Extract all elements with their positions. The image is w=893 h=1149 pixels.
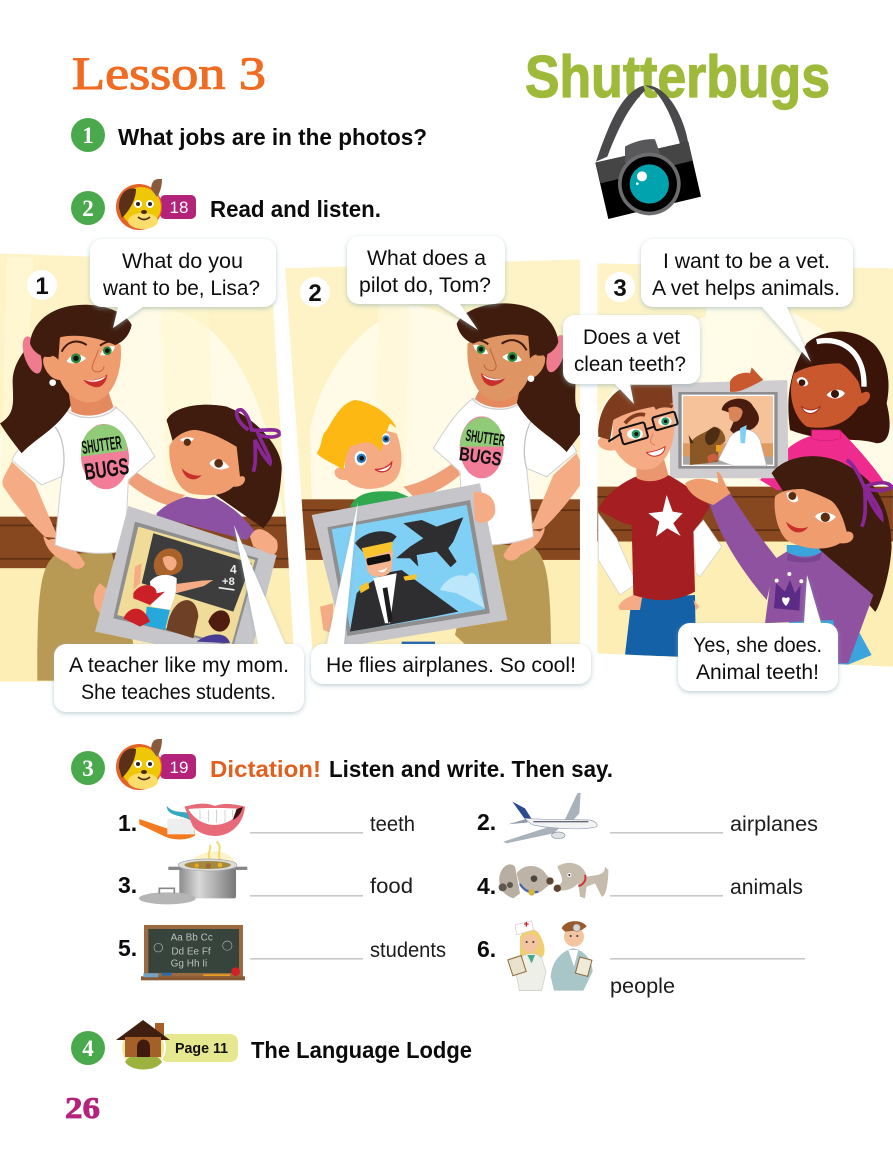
exercise item 1: teeth [118, 804, 415, 839]
icon: audio dog with track 18: 18 [170, 198, 188, 217]
speech bubble: A teacher like my mom: She teaches students. [81, 681, 276, 704]
exercise item 3: food: 3. [118, 872, 137, 898]
speech bubble: He flies airplanes [311, 502, 591, 684]
mom body mirrored [403, 398, 586, 672]
speech bubble: What does a pilot do, Tom?: What does a [367, 247, 486, 270]
step 3 badge: 3 [82, 756, 94, 781]
step 2 badge [71, 191, 105, 225]
speech bubble: Yes, she does [678, 575, 838, 691]
instruction 3 [210, 756, 613, 782]
step 2 badge: 2 [82, 196, 94, 221]
speech bubble: A teacher like my mom: A teacher like my mom. [69, 654, 289, 677]
exercise item 5: students [118, 925, 446, 980]
speech bubble: Does a vet clean teeth?: Does a vet [583, 326, 680, 349]
exercise item 5: students: Gg Hh Ii [171, 959, 207, 970]
icon: audio dog with track 19: 19 [170, 758, 188, 777]
frame with teacher photo: +8 [222, 576, 235, 588]
Lisa [157, 405, 282, 540]
heading: Shutterbugs: Shutterbugs [525, 44, 830, 110]
mom body mirrored: BUGS [458, 444, 503, 471]
exercise item 6: people: 6. [477, 936, 496, 962]
speech bubble: A teacher like my mom [54, 525, 304, 712]
speech bubble: Yes, she does: Animal teeth! [696, 661, 819, 684]
exercise item 4: animals: 4. [477, 873, 496, 899]
exercise item 5: students: students [370, 939, 446, 962]
vet-girl [760, 331, 890, 490]
speech bubble: Does a vet clean teeth? [563, 315, 700, 404]
mom body: BUGS [82, 453, 131, 485]
instruction 2: Read and listen. [210, 196, 381, 222]
instruction 4: The Language Lodge [251, 1037, 472, 1063]
title: Lesson 3: Lesson 3 [72, 48, 266, 100]
speech bubble: He flies airplanes: He flies airplanes. So cool! [326, 654, 576, 677]
exercise item 2: airplanes: airplanes [730, 813, 818, 836]
speech bubble: Does a vet clean teeth?: clean teeth? [574, 353, 686, 376]
icon: hanging camera [595, 86, 701, 219]
speech bubble: I want to be a vet [641, 239, 853, 362]
frame with teacher photo [94, 506, 278, 644]
number 3: 3 [613, 275, 627, 302]
number 1 [27, 270, 57, 300]
exercise item 2: airplanes [477, 793, 818, 843]
exercise item 6: people [477, 921, 805, 998]
icon: audio dog with track 19 [116, 739, 196, 790]
panel 3: vet [597, 262, 893, 668]
exercise item 6: people: people [610, 975, 675, 998]
exercise item 5: students: Dd Ee Ff [171, 946, 211, 957]
speech bubble: What does a pilot do, Tom? [347, 236, 505, 330]
exercise item 3: food: food [370, 875, 413, 898]
mom head [0, 305, 132, 453]
exercise item 4: animals: animals [730, 876, 803, 899]
hand over frame [730, 367, 763, 392]
panel 2: pilot [283, 258, 588, 672]
speech bubble: I want to be a vet: A vet helps animals. [652, 277, 840, 300]
instruction 3: Dictation! [210, 756, 321, 782]
step 3 badge [71, 751, 105, 785]
number 2: 2 [308, 280, 322, 307]
instruction 1: What jobs are in the photos? [118, 124, 427, 150]
speech bubble: Yes, she does: Yes, she does. [693, 634, 822, 657]
exercise item 1: teeth: 1. [118, 810, 137, 836]
number 1: 1 [35, 273, 49, 300]
boy [598, 385, 722, 657]
step 4 badge: 4 [82, 1036, 94, 1061]
exercise item 3: food [118, 842, 413, 904]
exercise item 5: students: 5. [118, 935, 137, 961]
instruction 3: Listen and write. Then say. [329, 756, 613, 782]
exercise item 2: airplanes: 2. [477, 809, 496, 835]
mom body mirrored: SHUTTER [464, 426, 506, 450]
exercise item 4: animals [477, 863, 803, 899]
step 1 badge [71, 118, 105, 152]
icon: language lodge with page tag: Page 11 [175, 1040, 228, 1057]
page number: 26 [65, 1090, 100, 1125]
frame with vet photo [670, 380, 788, 478]
speech bubble: What do you want to be, Lisa? [90, 239, 276, 328]
step 1 badge: 1 [82, 123, 94, 148]
icon: language lodge with page tag [116, 1020, 238, 1070]
speech bubble: What do you want to be, Lisa?: What do you [122, 250, 243, 273]
mom body [2, 407, 185, 681]
panel 1: teacher [0, 250, 300, 683]
speech bubble: I want to be a vet: I want to be a vet. [663, 250, 830, 273]
speech bubble: What does a pilot do, Tom?: pilot do, Tom? [359, 274, 491, 297]
Lisa pointing [685, 456, 892, 667]
exercise item 5: students: Aa Bb Cc [171, 932, 213, 943]
exercise item 1: teeth: teeth [370, 813, 415, 836]
step 4 badge [71, 1031, 105, 1065]
number 2 [300, 277, 330, 307]
number 3 [605, 272, 635, 302]
mom head mirrored [457, 303, 588, 452]
speech bubble: What do you want to be, Lisa?: want to be, Lisa? [102, 277, 260, 300]
frame with teacher photo: 4 [230, 562, 237, 576]
frame with pilot photo [312, 483, 507, 647]
Tom [317, 400, 408, 510]
mom body: SHUTTER [80, 432, 123, 458]
icon: audio dog with track 18 [116, 179, 196, 230]
